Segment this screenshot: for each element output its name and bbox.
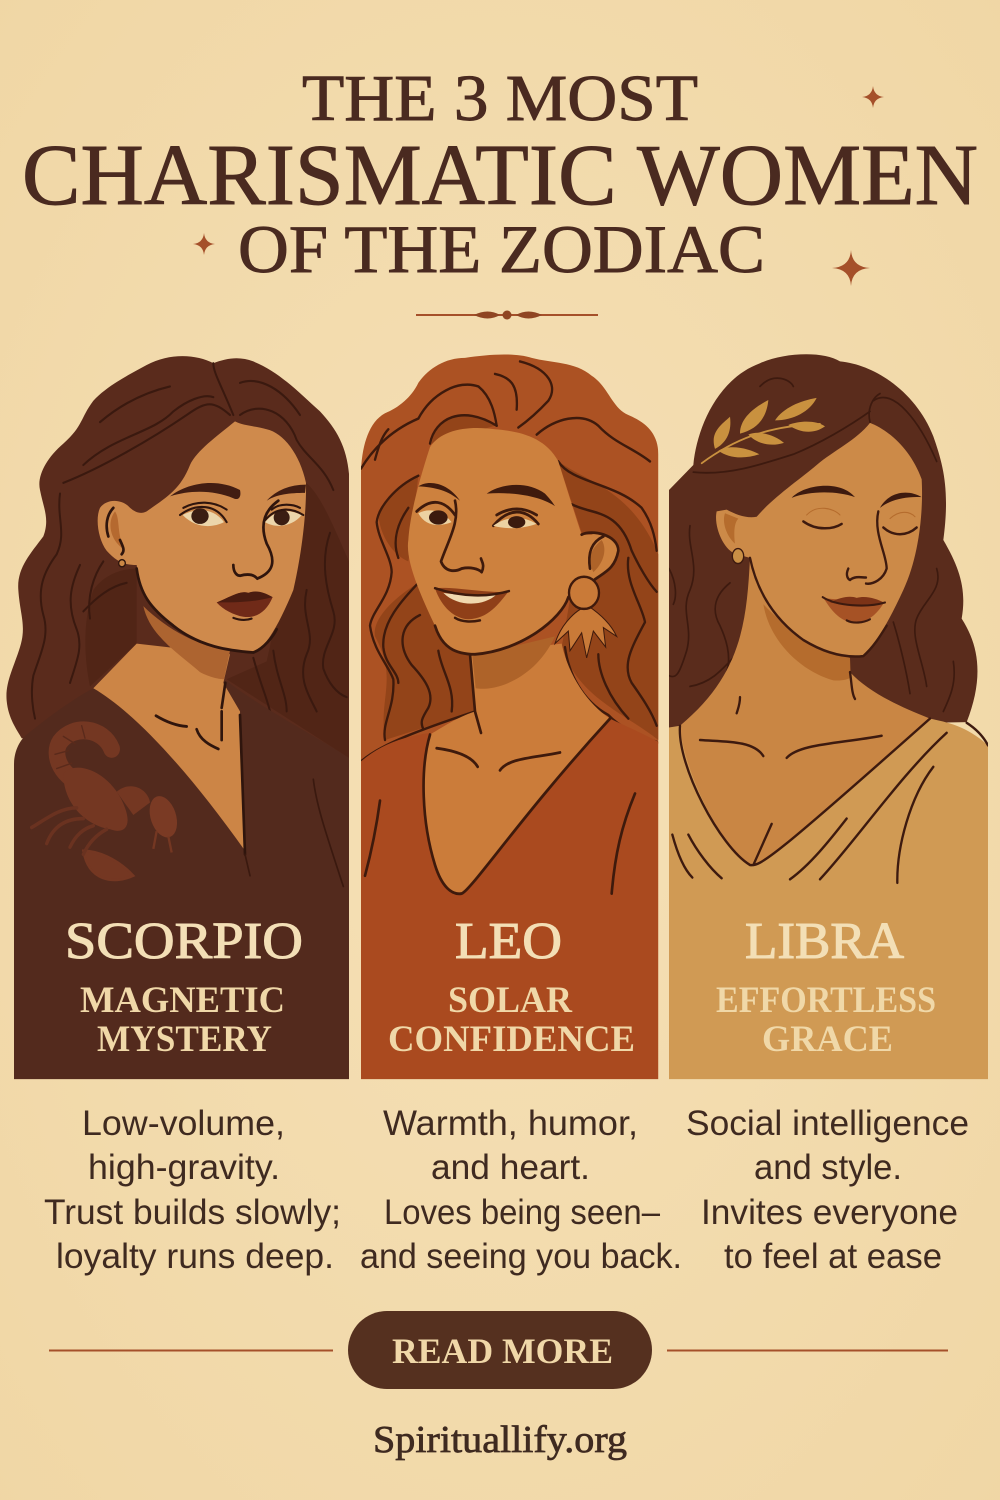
dress	[669, 719, 988, 1079]
title ornament divider	[416, 310, 598, 320]
subtitle: Effortless Grace: EFFORTLESS	[716, 980, 936, 1021]
text block: Libra description: to feel at ease	[724, 1237, 942, 1276]
eyes	[183, 510, 302, 526]
button: Read More	[348, 1311, 652, 1389]
subtitle: Magnetic Mystery: MAGNETIC	[80, 980, 285, 1021]
text block: Scorpio description	[44, 1104, 341, 1276]
lips	[823, 598, 884, 622]
title	[22, 62, 978, 287]
label: Scorpio: SCORPIO	[65, 913, 303, 970]
lips	[217, 592, 273, 617]
subtitle: Effortless Grace: GRACE	[762, 1019, 893, 1060]
text block: Scorpio description: Trust builds slowly;	[44, 1193, 341, 1232]
icon: sparkle top right	[862, 86, 884, 108]
icon: sparkle lower right	[832, 250, 870, 286]
button: Read More: READ MORE	[392, 1331, 613, 1371]
text block: Libra description	[686, 1104, 969, 1276]
portrait: Scorpio woman	[6, 356, 349, 1079]
text block: Leo description: and heart.	[431, 1148, 590, 1187]
skin	[680, 558, 930, 865]
smile	[435, 588, 508, 619]
icon: sparkle left	[193, 233, 215, 255]
text block: Leo description	[360, 1104, 682, 1276]
text block: Leo description: Loves being seen–	[384, 1193, 661, 1232]
title: CHARISMATIC WOMEN	[22, 126, 978, 223]
text block: Scorpio description: high-gravity.	[88, 1148, 280, 1187]
subtitle: Solar Confidence: SOLAR	[448, 980, 573, 1021]
title: OF THE ZODIAC	[238, 211, 765, 287]
text block: Leo description: and seeing you back.	[360, 1237, 682, 1276]
earring	[555, 606, 617, 658]
portrait: Leo woman	[361, 354, 658, 1079]
text block: Leo description: Warmth, humor,	[383, 1104, 638, 1143]
subtitle: Magnetic Mystery: MYSTERY	[97, 1019, 272, 1060]
title: THE 3 MOST	[302, 62, 698, 135]
website footer: Spirituallify.org	[373, 1419, 627, 1461]
subtitle: Solar Confidence	[388, 980, 635, 1060]
face	[716, 423, 922, 656]
dress	[361, 719, 658, 1079]
face	[98, 421, 306, 652]
label: Libra: LIBRA	[745, 913, 904, 970]
subtitle: Magnetic Mystery	[80, 980, 285, 1060]
eyes	[418, 510, 537, 528]
text block: Libra description: Social intelligence	[686, 1104, 969, 1143]
panel: Scorpio	[6, 356, 349, 1079]
text block: Scorpio description: Low-volume,	[82, 1104, 285, 1143]
icon: scorpion	[32, 726, 182, 880]
text block: Scorpio description: loyalty runs deep.	[56, 1237, 334, 1276]
icon: laurel sprig	[702, 398, 825, 463]
subtitle: Solar Confidence: CONFIDENCE	[388, 1019, 635, 1060]
panel: Leo	[361, 354, 658, 1079]
subtitle: Effortless Grace	[716, 980, 936, 1060]
panel: Libra	[669, 354, 988, 1079]
text block: Libra description: and style.	[754, 1148, 902, 1187]
label: Leo: LEO	[455, 913, 562, 970]
earring	[732, 549, 744, 564]
text block: Libra description: Invites everyone	[701, 1193, 958, 1232]
dress	[14, 681, 349, 1079]
portrait: Libra woman	[669, 354, 988, 1079]
face	[408, 428, 618, 654]
